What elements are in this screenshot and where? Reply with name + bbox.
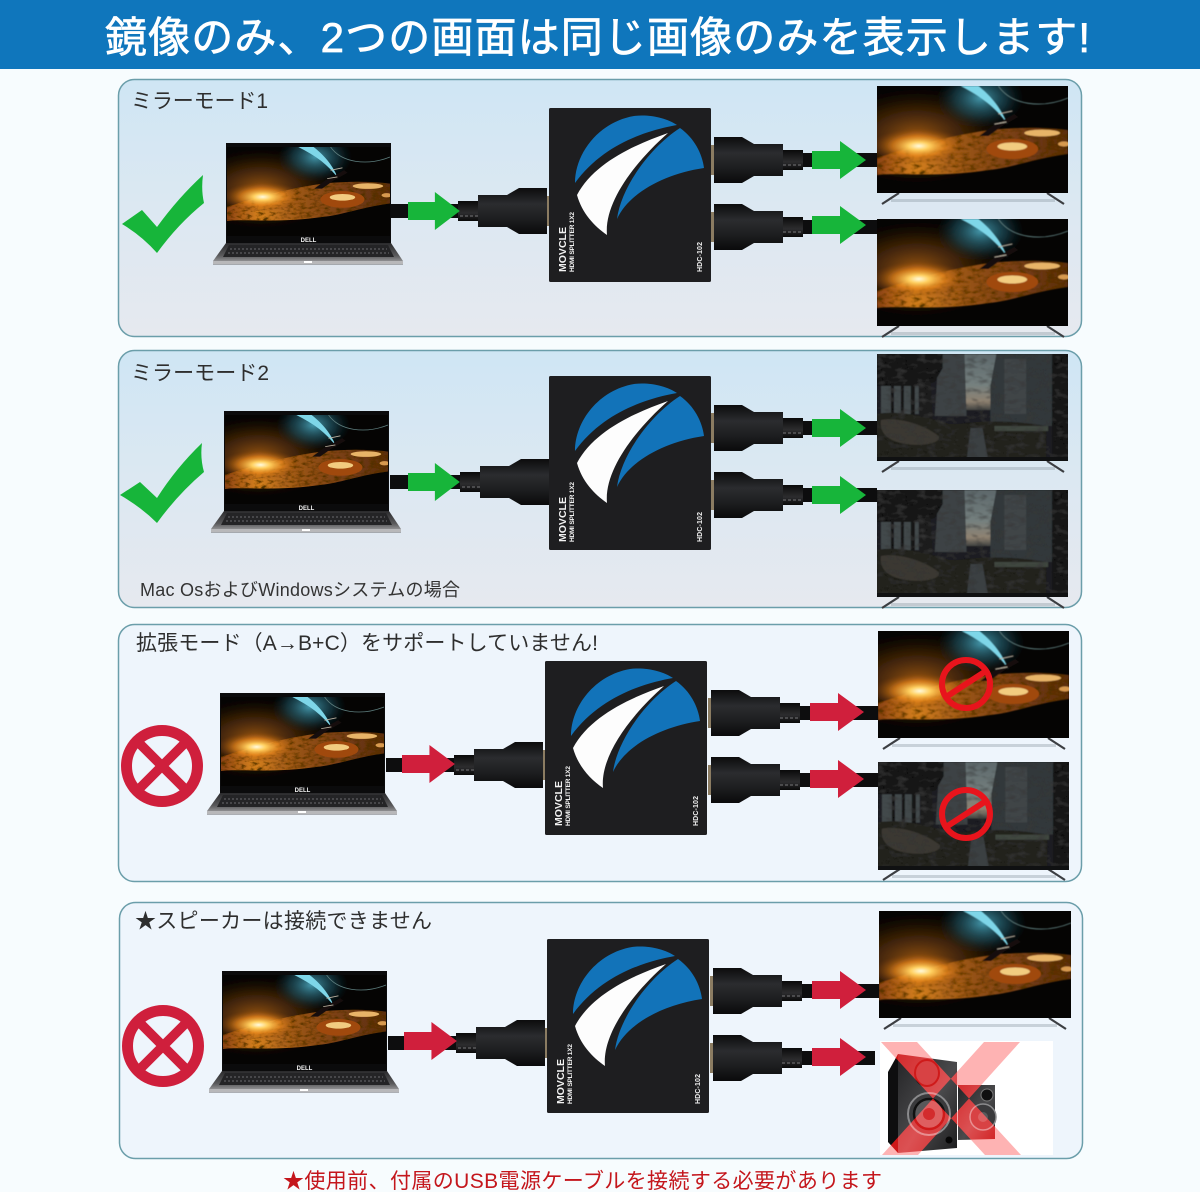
splitter box — [545, 661, 707, 835]
icon: red cross circle — [128, 1010, 198, 1082]
input HDMI cable — [390, 459, 552, 505]
arrow: input — [404, 1022, 457, 1060]
speakers crossed out — [880, 1041, 1053, 1155]
TV bottom — [825, 201, 1070, 337]
splitter box: HDC-102 — [695, 1074, 702, 1104]
TV bottom with prohibition sign — [878, 762, 1069, 880]
arrows: outputs — [812, 409, 866, 514]
splitter box: HDC-102 — [697, 512, 704, 542]
laptop: DELL — [299, 506, 315, 512]
splitter box: MOVCLE — [557, 497, 569, 542]
panel background — [120, 902, 1082, 1158]
laptop: DELL — [301, 238, 317, 244]
splitter box: HDMI SPLITTER 1X2 — [569, 482, 576, 542]
heading: extended mode unsupported: 拡張モード（A→B+C）をサポートしていません! — [136, 632, 598, 655]
splitter box: HDMI SPLITTER 1X2 — [567, 1044, 574, 1104]
icon: green check mark — [120, 443, 204, 523]
splitter box: MOVCLE — [553, 781, 565, 826]
panel: mirror mode 1 — [118, 68, 1082, 337]
input HDMI cable — [391, 188, 550, 234]
laptop — [181, 400, 401, 533]
output HDMI cables — [711, 137, 877, 250]
laptop: DELL — [297, 1066, 313, 1072]
icon: green check mark — [122, 175, 204, 253]
splitter box: HDMI SPLITTER 1X2 — [569, 212, 576, 272]
splitter box: MOVCLE — [557, 227, 569, 272]
laptop: DELL — [295, 788, 311, 794]
panel: extended mode not supported — [118, 613, 1082, 882]
TV top with prohibition sign — [826, 613, 1071, 749]
arrow: input — [408, 192, 460, 230]
laptop — [177, 682, 397, 815]
splitter box: HDMI SPLITTER 1X2 — [565, 766, 572, 826]
title banner: 鏡像のみ、2つの画面は同じ画像のみを表示します! — [105, 14, 1090, 61]
heading: speakers not supported: ★スピーカーは接続できません — [135, 910, 432, 933]
splitter box — [549, 376, 711, 550]
panel background — [118, 80, 1082, 336]
output HDMI cables — [710, 968, 879, 1081]
arrows: outputs — [812, 141, 866, 244]
panel: mirror mode 2 — [118, 350, 1082, 608]
laptop — [183, 132, 403, 265]
TV — [827, 893, 1073, 1029]
input HDMI cable — [386, 742, 546, 788]
laptop — [179, 960, 399, 1093]
splitter box — [549, 108, 711, 282]
TV bottom — [877, 490, 1068, 608]
arrow: input — [408, 463, 460, 501]
output HDMI cables — [711, 405, 877, 518]
panel background — [118, 624, 1082, 882]
input HDMI cable — [388, 1020, 548, 1066]
TV top — [825, 68, 1070, 204]
title banner — [0, 0, 1200, 69]
panel: speakers cannot be connected — [120, 893, 1082, 1158]
splitter box: MOVCLE — [555, 1059, 567, 1104]
arrows: outputs — [812, 971, 866, 1076]
icon: red cross circle — [126, 730, 198, 802]
panel background — [118, 350, 1082, 608]
arrows: outputs — [810, 693, 864, 798]
arrow: input — [402, 745, 455, 783]
output HDMI cables — [708, 690, 878, 803]
note: Mac OS and Windows: Mac OsおよびWindowsシステムの場合 — [140, 580, 460, 600]
TV top — [877, 354, 1068, 472]
splitter box: HDC-102 — [697, 242, 704, 272]
heading: mirror mode 1: ミラーモード1 — [131, 90, 268, 113]
splitter box: HDC-102 — [693, 796, 700, 826]
splitter box — [547, 939, 709, 1113]
heading: mirror mode 2: ミラーモード2 — [131, 362, 269, 385]
